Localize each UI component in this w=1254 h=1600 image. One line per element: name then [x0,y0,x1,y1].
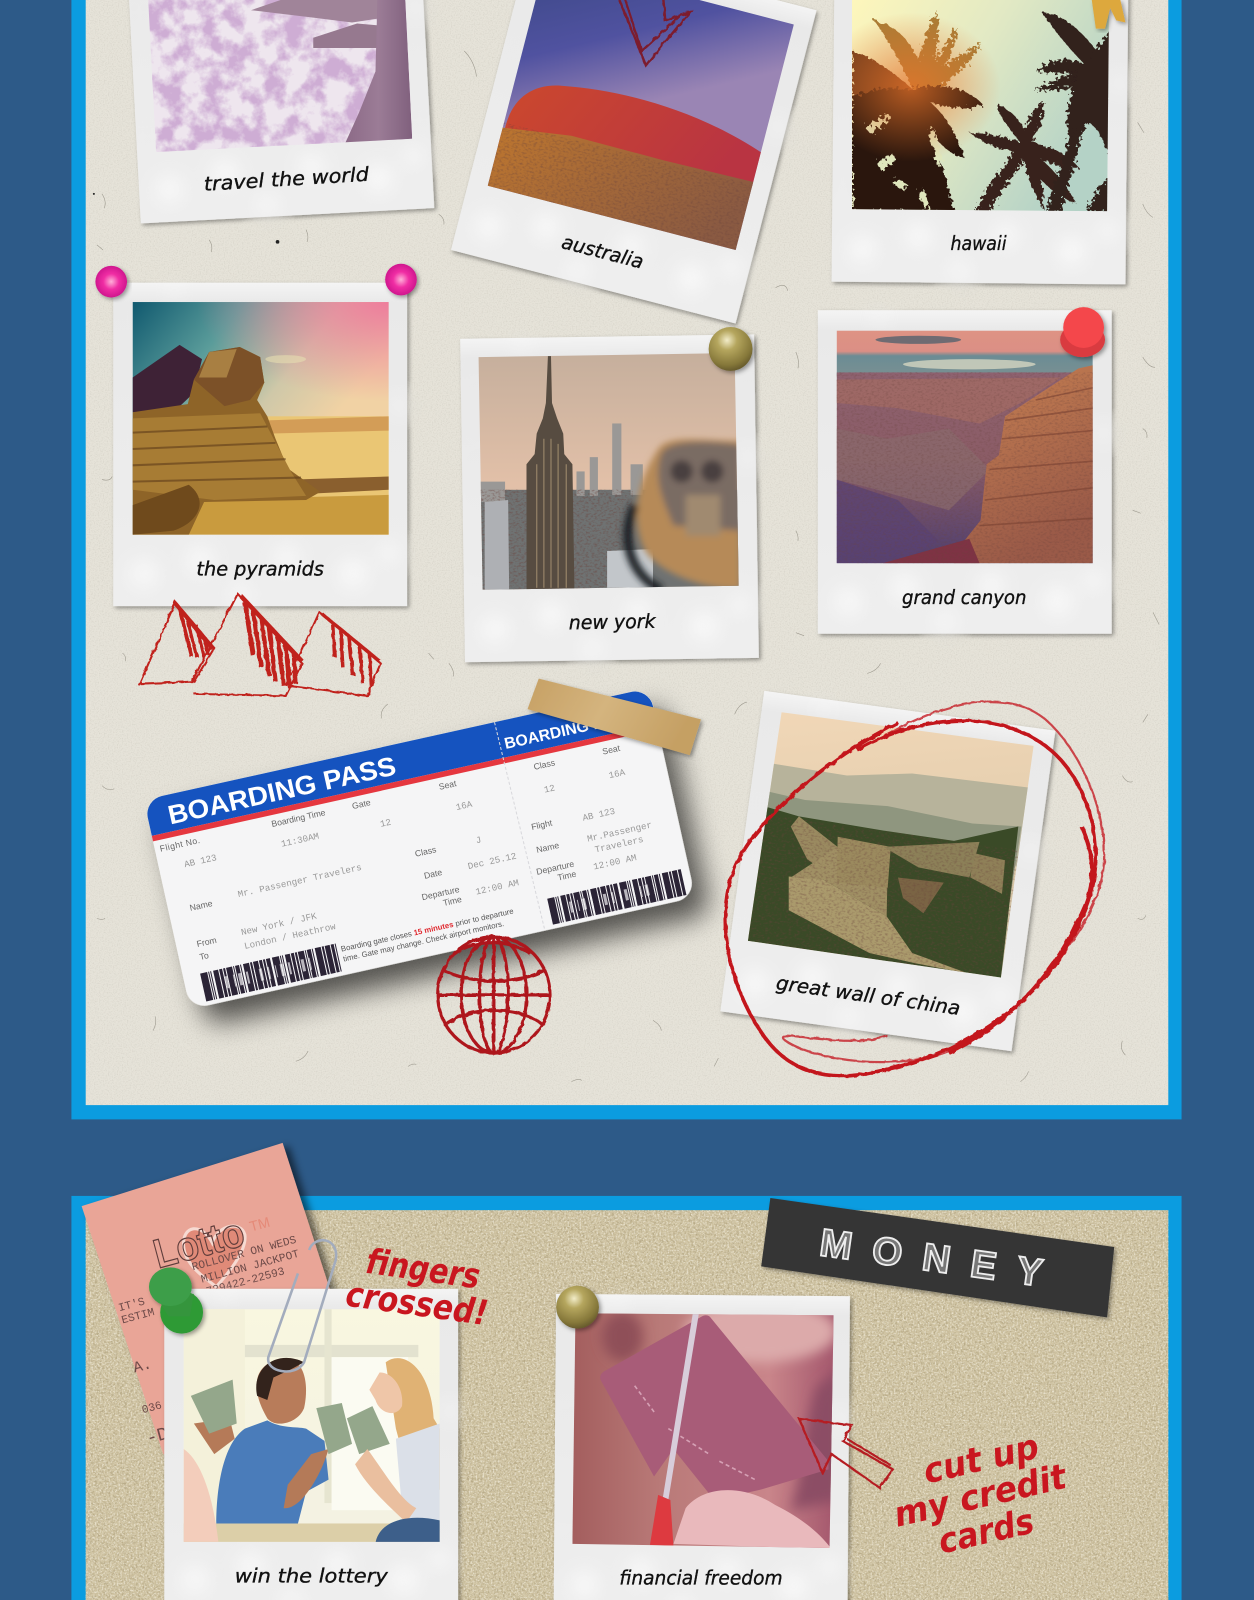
ticket values: AB 123 [581,806,616,824]
polaroid: hawaii [832,0,1128,284]
ticket values: 12 [379,817,392,830]
caption: grand canyon [902,586,1026,609]
polaroid: grand canyon [818,310,1112,634]
sketch arrow pointing at Uluru [619,0,690,65]
ticket heart motif [184,1226,245,1287]
ticket labels: Date [423,867,443,881]
caption: new york [569,610,656,634]
ticket labels: To [198,950,210,962]
polaroid: australia [451,0,817,323]
ticket values [183,759,660,961]
photo: palm trees [847,0,1112,214]
ticket print: ESTIM [120,1307,156,1327]
sphinx [133,347,320,535]
photo: couple with money [184,1309,440,1544]
photo: cutting up a credit card [572,1314,834,1548]
polaroid: win the lottery [164,1289,458,1600]
ticket values: 12:00 AM [475,877,520,898]
caption: win the lottery [235,1565,388,1588]
ticket labels: Name [535,840,560,855]
boarding pass [144,688,695,1009]
sketch: three pyramids [139,594,381,696]
kraft paper backing [86,1210,1168,1600]
ticket print: MILLION JACKPOT [200,1249,301,1287]
ticket print: 036 [141,1400,163,1417]
pink push pin right [385,264,417,295]
ticket labels: Boarding Time [270,807,327,829]
handwritten note: cut up my credit cards: cut up [919,1427,1043,1492]
ticket print: IT'S [117,1296,147,1315]
ticket labels: Time [557,869,577,883]
red crayon circle [725,702,1104,1076]
ticket print: 729422-22593 [205,1266,286,1299]
boarding notice: time. Gate may change. Check airport monitors. [342,919,505,964]
red stripe [152,724,658,841]
handwritten note: fingers crossed: crossed! [343,1275,490,1334]
ticket values: London / Heathrow [243,921,337,952]
ticket print: -D [144,1424,171,1450]
speckled paper backing [86,0,1168,1105]
ticket values: Mr.Passenger [586,820,653,845]
ticket labels: Class [414,844,438,859]
ticket values: Travelers [594,834,645,855]
caption: great wall of china [775,971,962,1020]
figurine pin on hawaii photo [1092,0,1125,29]
ticket labels: From [196,935,218,949]
ticket labels: Seat [438,778,458,792]
ticket labels: Flight [530,817,554,832]
photo: clouds from a plane window [143,0,418,158]
photo: great wall [748,712,1034,978]
desert layers [260,416,389,535]
handwritten note: cut up my credit cards: my credit [890,1457,1071,1536]
ticket labels: Departure [535,859,575,877]
ticket labels: Time [442,894,463,908]
ticket labels: Class [533,757,557,772]
photo: Empire State Building and viewer [478,353,739,590]
caption: the pyramids [196,558,324,581]
photo: sphinx and pyramid [133,302,389,535]
red plastic push pin [1060,307,1105,357]
caption: travel the world [203,163,370,196]
ticket body [144,688,695,1009]
main heading: BOARDING PASS [165,751,399,830]
ticket labels: Flight No. [159,835,201,854]
label: money [761,1198,1114,1317]
lotto logo: Lotto [149,1209,249,1277]
stub heading: BOARDING PASS [503,708,636,753]
polaroid: great wall of china [694,691,1055,1051]
barcode stub [550,882,685,912]
caption: financial freedom [619,1567,783,1590]
blue board frame [71,0,1182,1119]
brass tack [556,1286,599,1329]
ticket labels: Seat [601,743,621,757]
blue header [144,688,657,836]
ticket values: New York / JFK [240,910,318,938]
ticket values: 16A [608,767,627,781]
boarding notice: Boarding gate closes 15 minutes prior to departure [340,907,514,954]
man [216,1420,329,1523]
masking tape [528,679,701,755]
panel: money board [71,1196,1182,1600]
ticket values: J [475,834,482,846]
polaroid: the pyramids [113,283,407,606]
caption: hawaii [950,232,1007,255]
ticket values: Dec 25.12 [467,851,518,872]
polaroid: new york [460,334,759,662]
photo: canyon [837,331,1093,563]
ticket values: Mr. Passenger Travelers [237,862,363,900]
barcode main [203,957,339,988]
handwritten note: fingers crossed: fingers [364,1242,482,1297]
ticket values: 12 [543,782,556,796]
sketch: globe [438,937,550,1053]
ticket print [117,1235,301,1450]
ticket labels [159,742,646,965]
polaroid: travel the world [124,0,434,223]
handwritten note: cut up my credit cards [890,1427,1071,1563]
ticket print: A. [131,1355,154,1377]
caption: australia [559,230,646,273]
label: money: MONEY [817,1221,1066,1298]
trademark mark: TM [248,1215,272,1235]
handwritten note: fingers crossed [343,1242,490,1334]
sketch arrow pointing at card [799,1418,893,1488]
woman [386,1358,440,1490]
ticket labels: Gate [351,797,372,811]
panel: travel board [71,0,1182,1119]
golden upper fronds [873,10,982,97]
ticket labels: Name [189,898,214,913]
ticket values: 16A [455,799,474,813]
perforation [495,721,544,929]
ticket labels: Departure [421,884,461,902]
ticket print: ROLLOVER ON WEDS [191,1235,298,1274]
pink push pin left [95,266,127,297]
paper clip [268,1240,336,1371]
photo: Uluru [488,0,794,250]
blue board frame [71,1196,1182,1600]
ticket values: AB 123 [183,852,218,870]
ticket values: 11:30AM [280,831,320,850]
handwritten note: cut up my credit cards: cards [935,1502,1038,1563]
brass tack [709,327,753,371]
polaroid: financial freedom [554,1294,850,1600]
green push pin [149,1267,203,1334]
lottery ticket [82,1143,347,1454]
ticket values: 12:00 AM [592,852,638,872]
